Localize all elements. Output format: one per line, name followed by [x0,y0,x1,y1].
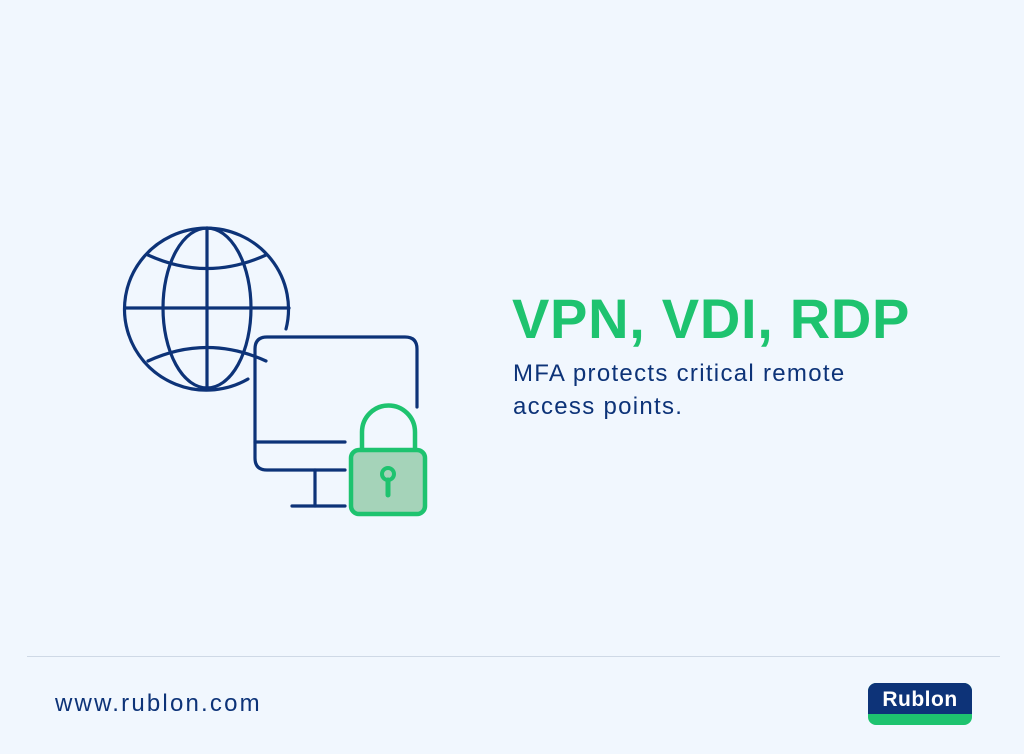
icon: monitor [255,337,417,506]
icon: padlock [351,406,425,514]
divider [27,656,1000,657]
logo: Rublon [868,683,972,725]
title: VPN, VDI, RDP [512,287,910,350]
footer url: www.rublon.com [55,690,262,717]
subtitle text: MFA protects critical remote access points. [513,360,846,420]
icon: globe [125,228,289,390]
logo: Rublon: Rublon [882,688,958,711]
